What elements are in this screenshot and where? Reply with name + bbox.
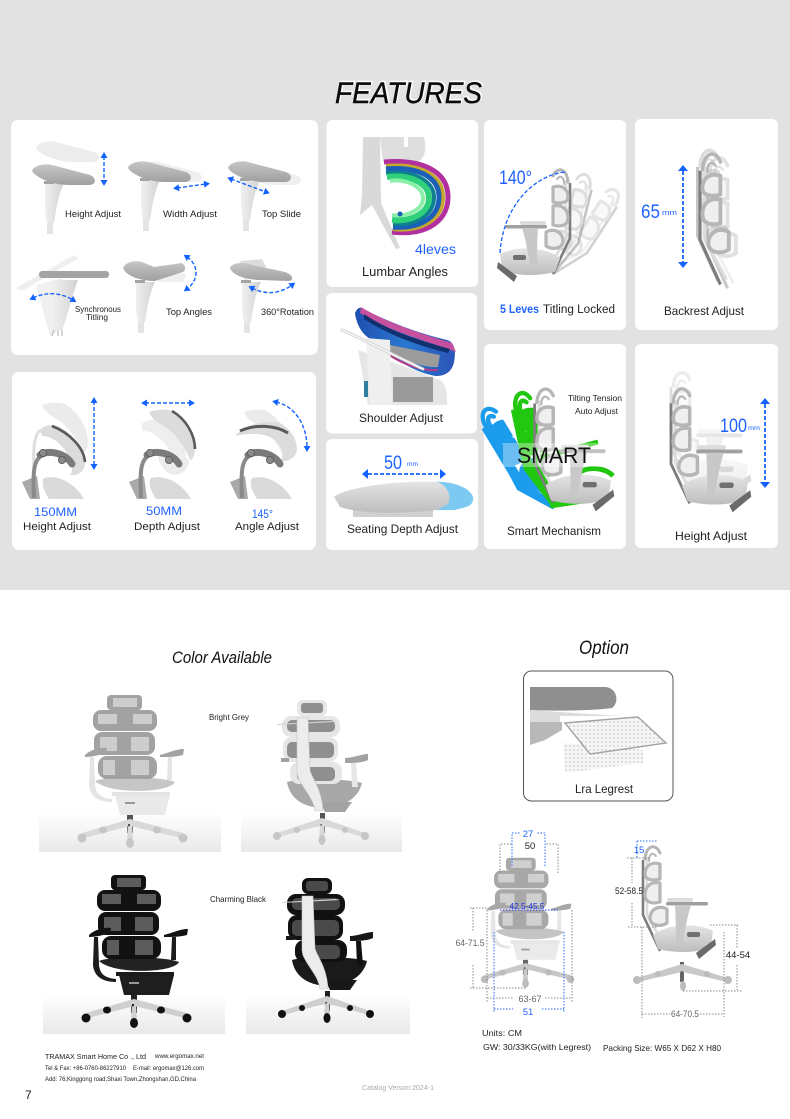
headrest: depth adjust <box>129 403 200 533</box>
dimension diagram: front: 27 <box>523 829 533 840</box>
panel: tilt locked: 140° <box>499 168 532 189</box>
catalog version: Catalog Verson:2024-1 <box>362 1085 434 1092</box>
panel: smart mechanism: SMART <box>517 443 591 468</box>
armrest: synchronous titling: Titling <box>86 313 108 322</box>
panel: backrest adjust: Backrest Adjust <box>664 304 745 318</box>
panel: height adjust: 100 <box>720 416 747 437</box>
heading: option: Option <box>579 638 629 659</box>
armrest: top angles: Top Angles <box>166 307 212 318</box>
heading: color available: Color Available <box>172 648 272 667</box>
label: charming black: Charming Black <box>210 894 267 904</box>
panel: height adjust <box>635 344 778 548</box>
company contact details: Add: 76,Kinggong road,Shaxi Town,Zhongshan,GD,China <box>45 1077 197 1083</box>
icon: legrest <box>530 687 666 773</box>
company contact details: www.ergomax.net <box>154 1054 204 1060</box>
panel: lumbar angles: Lumbar Angles <box>362 265 448 279</box>
title: FEATURES <box>336 76 483 109</box>
headrest: depth adjust: 50MM <box>146 504 182 518</box>
company contact details <box>45 1052 204 1083</box>
dimension diagram: front <box>456 829 574 1018</box>
panel: seating depth adjust: 50 <box>384 453 402 474</box>
armrest: top angles <box>123 257 212 333</box>
dimension diagram: side: 64-70.5 <box>671 1009 699 1019</box>
panel: shoulder adjust: Shoulder Adjust <box>359 411 444 425</box>
chair photo: charming black front <box>43 875 225 1034</box>
chair tilt positions <box>497 170 624 283</box>
dimension diagram: side <box>615 841 750 1019</box>
chair height positions <box>671 373 751 512</box>
company contact details: TRAMAX Smart Home Co ., Ltd <box>45 1052 146 1061</box>
armrest: height adjust: Height Adjust <box>65 209 121 220</box>
panel: seating depth adjust: Seating Depth Adjust <box>347 522 459 536</box>
panel: backrest adjust: 65 <box>641 202 660 223</box>
label: bright grey: Bright Grey <box>209 713 249 722</box>
dimension diagram: front: 42.5-45.5 <box>510 901 545 911</box>
armrest: width adjust <box>128 161 217 231</box>
chair backrest positions <box>698 150 736 288</box>
icon: seat <box>334 482 473 517</box>
panel: backrest adjust: mm <box>662 210 677 217</box>
headrest: angle adjust <box>230 402 307 533</box>
dimension diagram: front: 50 <box>525 841 535 852</box>
headrest: angle adjust: 145° <box>252 507 273 521</box>
dimension diagram: side: 15 <box>634 845 644 856</box>
chair with coloured tilt silhouettes <box>477 389 614 513</box>
company contact details: E-mail: ergomax@126.com <box>133 1066 204 1072</box>
panel: seating depth adjust <box>326 439 478 550</box>
specifications text: GW: 30/33KG(with Legrest) <box>483 1042 591 1052</box>
panel: smart mechanism: Smart Mechanism <box>507 524 601 538</box>
panel: shoulder adjust <box>326 293 477 434</box>
chair photo: bright grey front <box>39 695 221 852</box>
company contact details: Tel & Fax: +86-0760-86227910 <box>45 1066 127 1072</box>
title: FEATURES <box>335 77 482 110</box>
icon: shoulder band <box>342 307 456 405</box>
panel: tilt locked: 5 Leves <box>500 304 539 316</box>
dimension diagram: side: 44-54 <box>726 950 750 961</box>
panel: height adjust: mm <box>748 426 760 432</box>
armrest: synchronous titling: Synchronous <box>75 305 121 314</box>
dimension diagram: front: 63-67 <box>518 994 542 1004</box>
dimension diagram: front: 64-71.5 <box>456 938 484 948</box>
panel: legrest option <box>524 671 673 801</box>
panel: tilt locked <box>484 120 626 330</box>
panel: backrest adjust <box>635 119 778 330</box>
panel: legrest option: Lra Legrest <box>575 782 634 796</box>
dimension diagram: front: 51 <box>523 1007 533 1018</box>
dimension diagram: side: 52-58.5 <box>615 886 643 897</box>
armrest: top slide <box>228 161 301 231</box>
page number: 7 <box>25 1088 32 1102</box>
armrest: synchronous titling <box>16 255 121 336</box>
headrest: depth adjust: Depth Adjust <box>134 521 200 533</box>
headrest: height adjust: Height Adjust <box>23 521 91 533</box>
panel: lumbar angles <box>326 120 478 287</box>
grey features background <box>0 0 790 590</box>
headrest: height adjust <box>22 401 94 533</box>
panel: headrest adjustments <box>12 372 316 550</box>
icon: lumbar rainbow rings <box>360 137 448 249</box>
armrest: 360 rotation <box>230 259 314 333</box>
chair photo: charming black back <box>246 878 410 1034</box>
chair photo: bright grey back <box>241 700 402 852</box>
panel: armrest adjustments <box>11 120 318 355</box>
headrest: height adjust: 150MM <box>34 505 77 519</box>
specifications text: Packing Size: W65 X D62 X H80 <box>603 1043 721 1053</box>
panel: smart mechanism: Auto Adjust <box>575 407 619 416</box>
panel: smart mechanism: Tilting Tension <box>568 394 622 403</box>
armrest: height adjust <box>32 141 121 234</box>
panel: smart mechanism <box>477 344 626 549</box>
armrest: width adjust: Width Adjust <box>163 209 217 220</box>
panel: seating depth adjust: mm <box>407 462 418 468</box>
panel: tilt locked: Titling Locked <box>543 304 615 316</box>
panel: height adjust: Height Adjust <box>675 529 748 543</box>
armrest: top slide: Top Slide <box>262 209 301 220</box>
panel: lumbar angles: 4leves <box>415 241 456 257</box>
headrest: angle adjust: Angle Adjust <box>235 521 299 533</box>
armrest: 360 rotation: 360°Rotation <box>261 307 314 318</box>
specifications text <box>482 1028 721 1053</box>
specifications text: Units: CM <box>482 1028 522 1038</box>
